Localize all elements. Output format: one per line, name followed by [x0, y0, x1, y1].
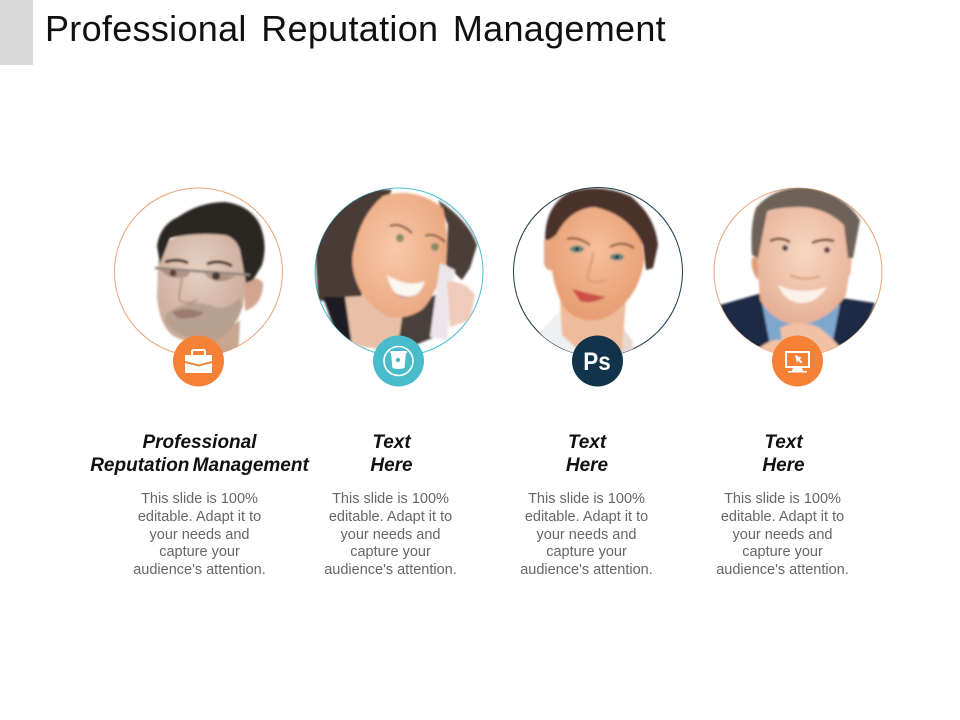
- text block 2: editable. Adapt it to: [329, 509, 452, 525]
- portrait 3: woman with brown hair: [514, 188, 682, 386]
- text block 2: audience's attention.: [324, 562, 457, 578]
- heading 2: Here: [370, 455, 413, 476]
- badge 3: Ps logo: Ps: [583, 348, 611, 376]
- text block 4: capture your: [742, 544, 823, 560]
- text block 1: capture your: [159, 544, 240, 560]
- text block 4: editable. Adapt it to: [721, 509, 844, 525]
- text block 3: [520, 491, 653, 578]
- badge 1: briefcase: [173, 336, 224, 386]
- text block 1: your needs and: [150, 527, 249, 543]
- badge 2: bucket icon: [373, 336, 424, 386]
- portrait 2: smiling woman on phone: [315, 188, 483, 386]
- text block 2: This slide is 100%: [332, 491, 449, 507]
- text block 2: your needs and: [341, 527, 440, 543]
- badge 4: monitor with cursor: [772, 336, 823, 386]
- text block 4: [716, 491, 849, 578]
- text block 4: audience's attention.: [716, 562, 849, 578]
- heading 1: Reputation Management: [90, 455, 309, 476]
- text block 1: [133, 491, 266, 578]
- text block 4: This slide is 100%: [724, 491, 841, 507]
- corner accent block: [0, 0, 33, 65]
- portraits and icon badges: [114, 187, 882, 386]
- text block 1: This slide is 100%: [141, 491, 258, 507]
- heading 4: Here: [762, 455, 805, 476]
- heading 3: [566, 432, 608, 476]
- portrait 4: smiling man in suit: [714, 188, 882, 386]
- text block 2: [324, 491, 457, 578]
- text block 3: capture your: [546, 544, 627, 560]
- heading 1: Professional: [142, 432, 257, 453]
- heading 2: Text: [372, 432, 411, 453]
- text block 1: editable. Adapt it to: [138, 509, 261, 525]
- text block 3: This slide is 100%: [528, 491, 645, 507]
- text block 4: your needs and: [733, 527, 832, 543]
- portrait 1: man with glasses: [114, 188, 282, 386]
- heading 4: [762, 432, 805, 476]
- text block 3: your needs and: [537, 527, 636, 543]
- badge 3: Ps logo: [572, 336, 623, 386]
- heading 3: Text: [568, 432, 606, 453]
- heading 1: [90, 432, 310, 476]
- text block 3: editable. Adapt it to: [525, 509, 648, 525]
- heading 3: Here: [566, 455, 608, 476]
- text block 2: capture your: [350, 544, 431, 560]
- title: Professional Reputation Management: [45, 8, 666, 49]
- text block 3: audience's attention.: [520, 562, 653, 578]
- heading 4: Text: [764, 432, 803, 453]
- heading 2: [370, 432, 413, 476]
- text block 1: audience's attention.: [133, 562, 266, 578]
